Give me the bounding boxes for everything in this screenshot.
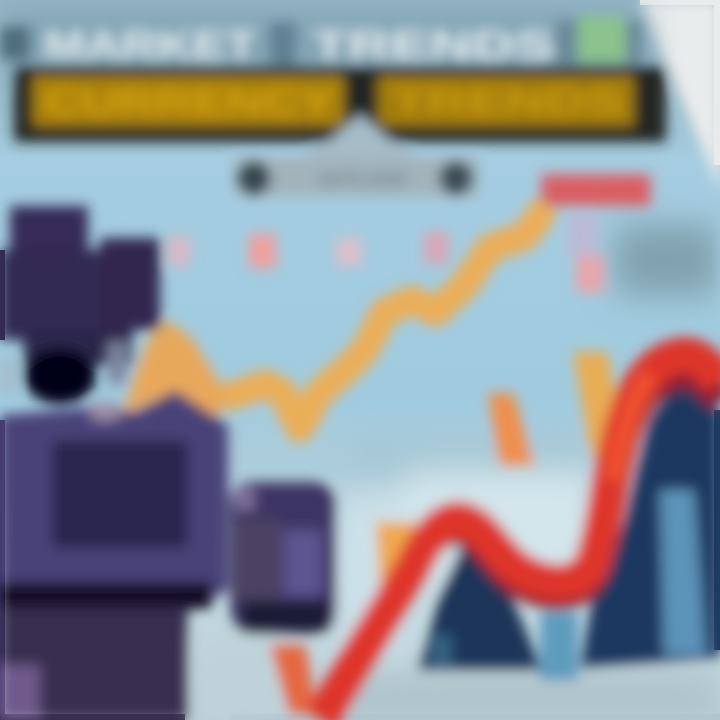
red wave line — [321, 355, 720, 720]
dark frame — [14, 66, 666, 142]
orange hand — [122, 320, 232, 424]
pale mist left — [340, 495, 405, 655]
pale gap left — [0, 358, 16, 394]
title band wash — [0, 14, 645, 68]
gap — [540, 612, 578, 680]
right peak — [580, 370, 720, 668]
chest panel — [52, 440, 188, 548]
head — [0, 206, 160, 365]
grey note right — [615, 225, 720, 295]
left peak — [418, 545, 542, 670]
title text right: TRENDS — [312, 25, 554, 67]
lower left tint — [0, 665, 40, 720]
torso — [0, 390, 228, 610]
red wave highlight — [612, 375, 650, 480]
white page corner — [640, 0, 720, 190]
arm — [230, 482, 336, 634]
trapezoid — [295, 114, 425, 160]
pale gap right — [108, 342, 126, 384]
grey band — [350, 445, 590, 467]
plate — [236, 158, 478, 196]
subtitle text: OUTLOOK — [318, 169, 408, 191]
left dark tab — [0, 26, 30, 60]
orange floating bars — [270, 352, 624, 714]
left peak lower tint — [430, 635, 452, 667]
collar tint — [92, 402, 118, 420]
headline text right: TRENDS — [392, 81, 624, 122]
light strip — [660, 490, 706, 655]
divider mark — [270, 22, 296, 64]
faint pink tick labels — [168, 214, 604, 292]
top title banner — [0, 16, 642, 67]
yellow rising line — [225, 206, 547, 428]
green badge — [578, 16, 626, 62]
yellow headline bar — [14, 66, 666, 142]
yellow right panel — [378, 76, 634, 126]
red label text: 2025 — [548, 177, 644, 207]
headline text left: CURRENCY — [44, 81, 334, 122]
red label — [541, 174, 651, 207]
center subtitle plate — [236, 114, 478, 196]
left dark dot — [237, 161, 271, 195]
ground left — [195, 635, 275, 720]
badge — [556, 20, 642, 64]
lower body — [0, 608, 188, 720]
right dark dot — [439, 161, 473, 195]
waist shadow — [0, 582, 212, 610]
neck shadow — [24, 348, 96, 404]
red wave shadow — [321, 374, 720, 720]
title text left: MARKET — [44, 25, 256, 67]
pale mist behind waves — [405, 470, 595, 580]
dark blue chart peaks — [418, 370, 720, 680]
yellow left panel — [33, 76, 344, 126]
ground — [340, 675, 720, 720]
purple figure — [0, 206, 336, 720]
